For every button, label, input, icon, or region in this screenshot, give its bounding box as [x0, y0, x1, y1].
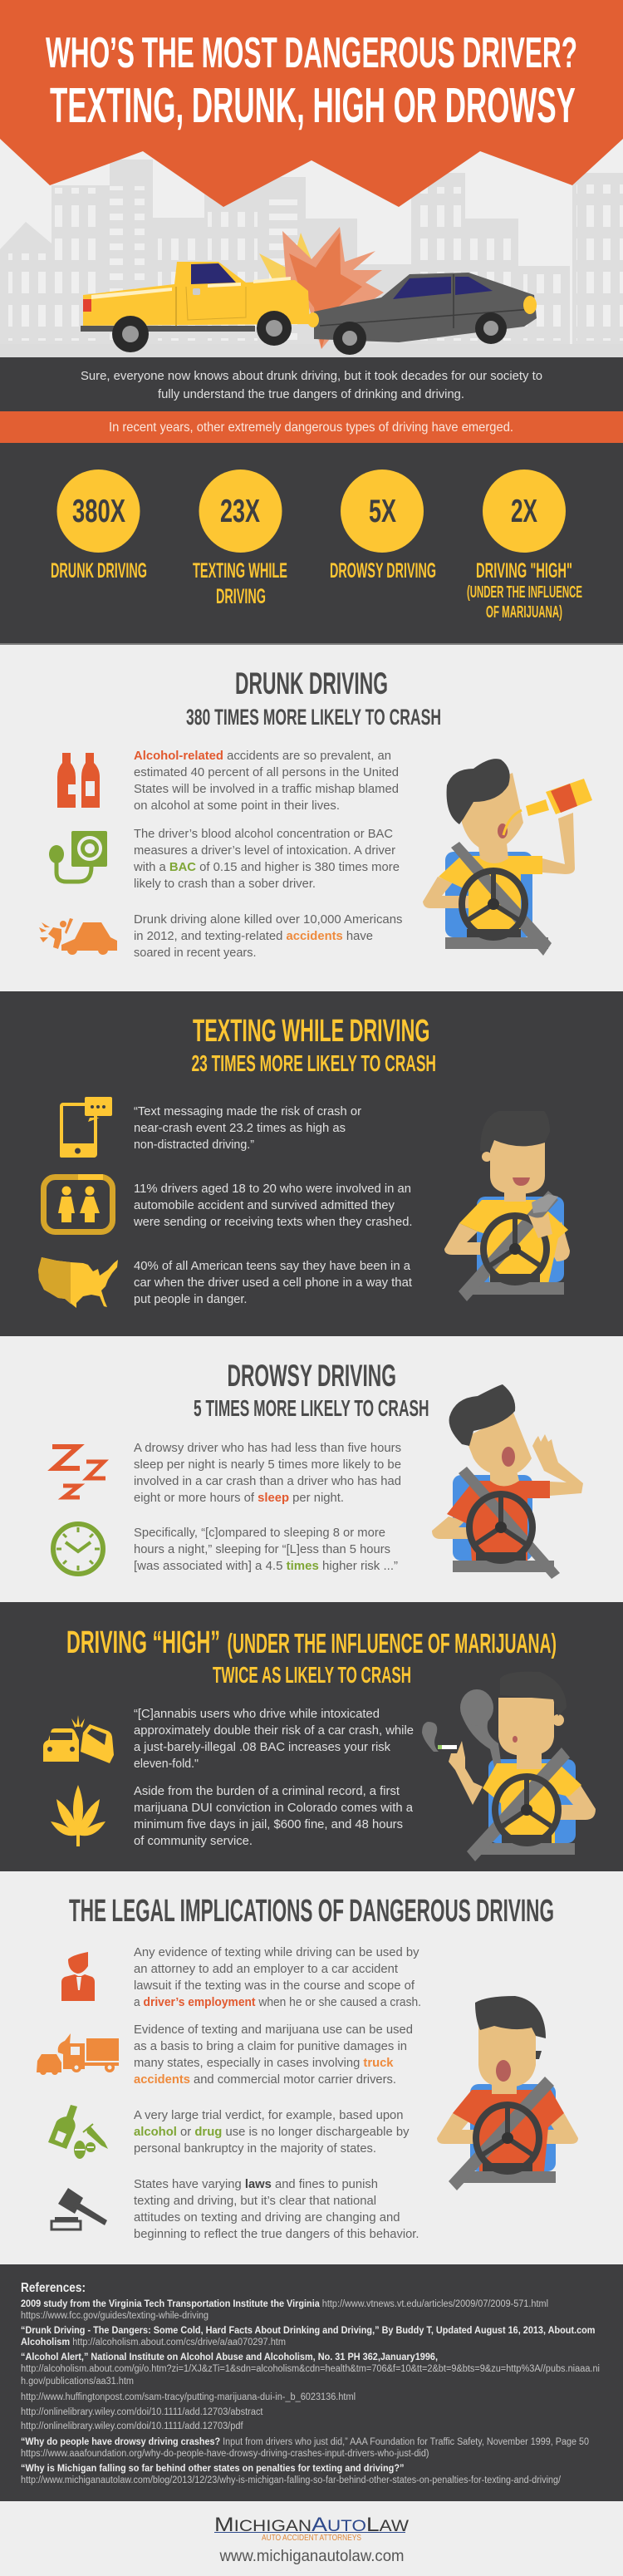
references list: “Why do people have drowsy driving crashes? Input from drivers who just did,” AAA Foundation for Traffic Safety, November 1999, Page 50: [21, 2437, 589, 2447]
text: drunk driving deaths: in 2012, and texting-related accidents have: [134, 929, 373, 943]
intro text: Sure, everyone now knows about drunk driving, but it took decades for our society to: [81, 369, 542, 383]
stat: driving high: [467, 469, 582, 622]
icon: yellow pickup truck: [81, 262, 310, 352]
text: sleep comparison: hours a night,” sleeping for “[L]ess than 5 hours: [134, 1542, 390, 1556]
panel: hero: [0, 0, 623, 357]
text: alcohol-related: [134, 749, 399, 813]
icon: gavel: [52, 2188, 107, 2229]
icon: car hitting pedestrian: [39, 918, 117, 955]
references list: https://www.fcc.gov/guides/texting-while-driving: [21, 2311, 208, 2321]
text: punitive damages: as a basis to bring a claim for punitive damages in: [134, 2039, 407, 2053]
panel: overview statistics: [0, 357, 623, 645]
text: text messaging risk: [134, 1104, 361, 1152]
heading: texting while driving: TEXTING WHILE DRIVING: [193, 1014, 430, 1049]
website URL: www.michiganautolaw.com: [219, 2548, 404, 2565]
text: employer liability: a driver’s employment when he or she caused a crash.: [134, 1995, 421, 2009]
text: BAC: measures a driver’s level of intoxication. A driver: [134, 843, 395, 858]
text: employer liability: lawsuit if the texting was in the course and scope of: [134, 1979, 415, 1993]
references list: http://onlinelibrary.wiley.com/doi/10.1111/add.12703/pdf: [21, 2421, 243, 2431]
icon: phone with message bubble: [60, 1097, 112, 1158]
heading: driving high: TWICE AS LIKELY TO CRASH: [213, 1662, 411, 1688]
text: bankruptcy: personal bankruptcy in the majority of states.: [134, 2141, 376, 2156]
references list: https://www.aaafoundation.org/why-do-people-have-drowsy-driving-crashes-input-drivers-who-just-did): [21, 2449, 429, 2459]
heading: drunk driving: DRUNK DRIVING: [235, 666, 388, 701]
intro text: [81, 369, 542, 401]
references list: “Alcohol Alert,” National Institute on Alcohol Abuse and Alcoholism, No. 31 PH 362,January1996,: [21, 2352, 438, 2362]
text: punitive damages: Evidence of texting and marijuana use can be used: [134, 2023, 413, 2037]
references heading: References:: [21, 2281, 86, 2295]
text: alcohol-related: on alcohol at some point in their lives.: [134, 799, 340, 813]
references list: http://www.huffingtonpost.com/sam-tracy/putting-marijuana-dui-in-_b_6023136.html: [21, 2392, 356, 2402]
intro text: fully understand the true dangers of drinking and driving.: [158, 387, 464, 401]
stat: drowsy driving: [330, 469, 436, 583]
illustration: shouting driver: [437, 1996, 578, 2190]
panel: texting while driving: [0, 991, 623, 1336]
icon: clock: [53, 1524, 103, 1574]
text: American teens: 40% of all American teens say they have been in a: [134, 1259, 411, 1273]
panel: driving high: [0, 1602, 623, 1871]
stat: drowsy driving: 5X: [369, 494, 396, 529]
city skyline: [0, 160, 623, 357]
stat: drowsy driving: DROWSY DRIVING: [330, 559, 436, 583]
header banner: [0, 0, 623, 207]
panel: drunk driving: [0, 645, 623, 991]
text: cannabis users: “[C]annabis users who drive while intoxicated: [134, 1707, 380, 1721]
references list: “Why is Michigan falling so far behind other states on penalties for texting and driving?”: [21, 2464, 404, 2474]
text: state laws: beginning to reflect the true dangers of this behavior.: [134, 2227, 419, 2241]
stat: drunk driving: 380X: [72, 494, 125, 529]
stat: drunk driving: [51, 469, 147, 583]
heading: drunk driving: 380 TIMES MORE LIKELY TO CRASH: [186, 705, 441, 730]
text: sleep comparison: [was associated with] a 4.5 times higher risk ...”: [134, 1559, 398, 1573]
text: drowsy driver: involved in a car crash than a driver who has had: [134, 1474, 401, 1488]
text: drowsy driver: [134, 1441, 401, 1505]
stat: drunk driving: DRUNK DRIVING: [51, 559, 147, 583]
text: criminal record: Aside from the burden of a criminal record, a first: [134, 1784, 400, 1798]
text: BAC: [133, 827, 400, 891]
icon: employer: [61, 1952, 95, 2001]
text: employer liability: an attorney to add an employer to a car accident: [134, 1962, 399, 1976]
text: criminal record: marijuana DUI conviction in Colorado comes with a: [134, 1801, 414, 1815]
heading: texting while driving: [191, 1014, 436, 1076]
stat: texting while driving: 23X: [220, 494, 260, 529]
text: cannabis users: a just-barely-illegal .08 BAC increases your risk: [134, 1740, 390, 1754]
text: drowsy driver: A drowsy driver who has had less than five hours: [134, 1441, 401, 1455]
text: drivers aged 18 to 20: automobile accident and survived admitted they: [134, 1198, 395, 1212]
icon: crash explosion: [249, 227, 384, 349]
heading: texting while driving: 23 TIMES MORE LIKELY TO CRASH: [191, 1050, 436, 1076]
heading: drowsy driving: [194, 1359, 429, 1421]
text: drunk driving deaths: soared in recent years.: [134, 946, 256, 960]
text: American teens: car when the driver used a cell phone in a way that: [134, 1276, 413, 1290]
references list: “Drunk Driving - The Dangers: Some Cold, Hard Facts About Drinking and Driving,” By Buddy T, Updated August 16, 2013, About.com: [21, 2326, 595, 2336]
icon: map of the USA: [38, 1257, 118, 1308]
text: BAC: with a BAC of 0.15 and higher is 380 times more: [133, 860, 400, 874]
references list: [21, 2299, 600, 2485]
illustration: drunk driver: [423, 759, 592, 956]
heading: driving high: DRIVING “HIGH”: [66, 1625, 220, 1660]
panel: references: [0, 2264, 623, 2501]
text: cannabis users: eleven-fold.": [134, 1757, 199, 1771]
text: punitive damages: [134, 2023, 413, 2087]
text: punitive damages: many states, especially in cases involving truck: [134, 2056, 394, 2070]
heading: drowsy driving: 5 TIMES MORE LIKELY TO CRASH: [194, 1395, 429, 1421]
heading: driving high: [66, 1625, 557, 1688]
text: employer liability: Any evidence of texting while driving can be used by: [134, 1945, 419, 1959]
text: cannabis users: approximately double their risk of a car crash, while: [134, 1723, 414, 1738]
text: alcohol-related: Alcohol-related accidents are so prevalent, an: [134, 749, 391, 763]
text: American teens: [134, 1259, 413, 1306]
text: state laws: [134, 2177, 419, 2241]
stat: texting while driving: TEXTING WHILE: [193, 559, 287, 583]
panel: drowsy driving: [0, 1336, 623, 1602]
orange band: In recent years, other extremely dangerous types of driving have emerged.: [109, 420, 513, 435]
references list: http://onlinelibrary.wiley.com/doi/10.1111/add.12703/abstract: [21, 2407, 263, 2417]
text: text messaging risk: near-crash event 23.2 times as high as: [134, 1121, 346, 1135]
text: alcohol-related: States will be involved in a traffic mishap blamed: [134, 782, 399, 796]
text: state laws: texting and driving, but it’s clear that national: [134, 2194, 376, 2208]
text: drowsy driver: eight or more hours of sleep per night.: [134, 1491, 344, 1505]
illustration: drowsy driver: [432, 1384, 583, 1579]
logo: Michigan Auto Law: AUTO ACCIDENT ATTORNEYS: [262, 2534, 361, 2543]
text: drivers aged 18 to 20: 11% drivers aged 18 to 20 who were involved in an: [134, 1182, 411, 1196]
text: criminal record: minimum five days in jail, $600 fine, and 48 hours: [134, 1817, 403, 1831]
text: text messaging risk: “Text messaging made the risk of crash or: [134, 1104, 361, 1118]
heading: drowsy driving: DROWSY DRIVING: [228, 1359, 396, 1393]
references list: Alcoholism http://alcoholism.about.com/cs/drive/a/aa070297.htm: [21, 2338, 286, 2347]
references list: h.gov/publications/aa31.htm: [21, 2377, 134, 2387]
text: BAC: likely to crash than a sober driver.: [134, 877, 316, 891]
text: cannabis users: [134, 1707, 414, 1771]
text: alcohol-related: estimated 40 percent of all persons in the United: [134, 765, 399, 779]
references list: http://www.michiganautolaw.com/blog/2013/12/23/why-is-michigan-falling-so-far-behind-other-states-on-penalties-for-texting-and-driving/: [21, 2475, 562, 2485]
text: drivers aged 18 to 20: were sending or receiving texts when they crashed.: [133, 1215, 412, 1229]
icon: teens: [43, 1174, 113, 1231]
text: employer liability: [134, 1945, 421, 2009]
stat: texting while driving: [193, 469, 287, 608]
text: drowsy driver: sleep per night is nearly 5 times more likely to be: [134, 1458, 401, 1472]
stat: driving high: OF MARIJUANA): [486, 603, 562, 622]
heading: drunk driving: [186, 666, 441, 730]
icon: two crashed cars: [43, 1715, 114, 1763]
illustration: texting driver: [444, 1111, 570, 1301]
icon: grey car: [307, 273, 537, 355]
illustration: high driver: [422, 1672, 596, 1861]
panel: legal implications: [0, 1871, 623, 2264]
text: state laws: attitudes on texting and driving are changing and: [134, 2210, 400, 2225]
panel: footer: [0, 2501, 623, 2576]
text: state laws: States have varying laws and fines to punish: [134, 2177, 378, 2191]
icon: bottles: [57, 753, 100, 808]
text: drivers aged 18 to 20: [133, 1182, 412, 1229]
text: text messaging risk: non-distracted driving.”: [134, 1138, 254, 1152]
logo: Michigan Auto Law: MICHIGAN AUTO LAW: [214, 2514, 409, 2536]
stat: texting while driving: DRIVING: [216, 585, 266, 608]
title: [46, 29, 577, 133]
text: sleep comparison: [134, 1526, 398, 1573]
text: bankruptcy: [134, 2108, 410, 2156]
references list: http://alcoholism.about.com/gi/o.htm?zi=1/XJ&zTi=1&sdn=alcoholism&cdn=health&tm=706&f=10&tt=2&bt=9&bts=9&zu=http%3A//pubs.niaaa.ni: [21, 2364, 600, 2374]
text: criminal record: [134, 1784, 414, 1848]
icon: breathalyzer gauge: [49, 831, 107, 882]
icon: sleep Zs: [52, 1447, 105, 1497]
text: BAC: The driver’s blood alcohol concentration or BAC: [134, 827, 393, 841]
references list: 2009 study from the Virginia Tech Transportation Institute the Virginia http://www.vtnews.vt.edu/articles/2009/07/2009-571.html: [21, 2299, 548, 2309]
text: drunk driving deaths: Drunk driving alone killed over 10,000 Americans: [134, 912, 402, 927]
text: bankruptcy: alcohol or drug use is no longer dischargeable by: [134, 2125, 410, 2139]
icon: alcohol and drugs: [48, 2105, 108, 2159]
orange band: [0, 411, 623, 443]
text: punitive damages: accidents and commercial motor carrier drivers.: [134, 2072, 396, 2087]
text: drunk driving deaths: [134, 912, 402, 960]
text: sleep comparison: Specifically, “[c]ompared to sleeping 8 or more: [134, 1526, 385, 1540]
icon: truck accident: [37, 2033, 119, 2075]
stat: driving high: 2X: [511, 494, 537, 529]
text: criminal record: of community service.: [134, 1834, 253, 1848]
text: bankruptcy: A very large trial verdict, for example, based upon: [134, 2108, 404, 2122]
text: American teens: put people in danger.: [134, 1292, 248, 1306]
icon: marijuana leaf: [51, 1785, 105, 1846]
